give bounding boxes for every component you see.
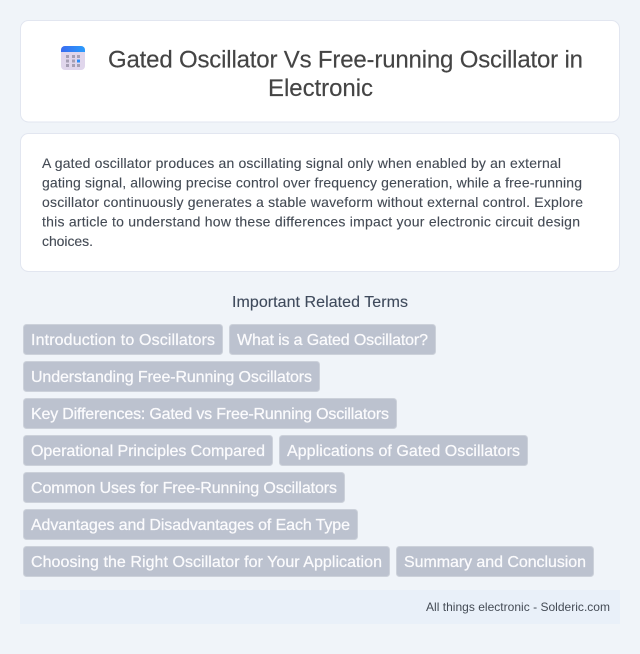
tag: Understanding Free-Running Oscillators (31, 369, 312, 386)
footer: All things electronic - Solderic.com (426, 600, 610, 614)
tag (24, 510, 358, 540)
tag (24, 362, 320, 392)
tag (24, 472, 344, 502)
tag: Common Uses for Free-Running Oscillators (31, 480, 337, 497)
tag (24, 398, 396, 428)
title: Electronic (268, 75, 373, 102)
tag: What is a Gated Oscillator? (237, 332, 428, 349)
tag (24, 546, 390, 576)
tag: Operational Principles Compared (31, 443, 265, 460)
footer (20, 590, 620, 624)
panel: introduction text: choices. (42, 233, 93, 249)
panel: introduction text: this article to understand how these differences impact your electronic circuit design (42, 214, 580, 230)
panel: related term tags (24, 324, 594, 576)
tag (24, 324, 222, 354)
panel: title card (20, 20, 620, 122)
panel: introduction text (20, 134, 620, 272)
panel: introduction text: A gated oscillator produces an oscillating signal only when enabled by an external (42, 155, 561, 171)
tag: Introduction to Oscillators (31, 332, 215, 349)
title (108, 46, 583, 102)
heading: important related terms: Important Related Terms (232, 294, 408, 311)
tag: Applications of Gated Oscillators (287, 443, 520, 460)
tag (24, 436, 272, 466)
tag: Advantages and Disadvantages of Each Type (31, 517, 350, 534)
tag (280, 436, 528, 466)
tag: Summary and Conclusion (404, 554, 586, 571)
title: Gated Oscillator Vs Free-running Oscillator in (108, 46, 583, 74)
tag: Key Differences: Gated vs Free-Running Oscillators (31, 406, 389, 423)
tag (396, 546, 594, 576)
tag: Choosing the Right Oscillator for Your Application (31, 554, 382, 571)
tag (230, 324, 436, 354)
panel: introduction text: oscillator continuously generates a stable waveform without external control. Explore (42, 194, 583, 210)
icon: calendar (61, 46, 85, 70)
panel: introduction text: gating signal, allowing precise control over frequency generation, while a free-running (42, 174, 582, 190)
